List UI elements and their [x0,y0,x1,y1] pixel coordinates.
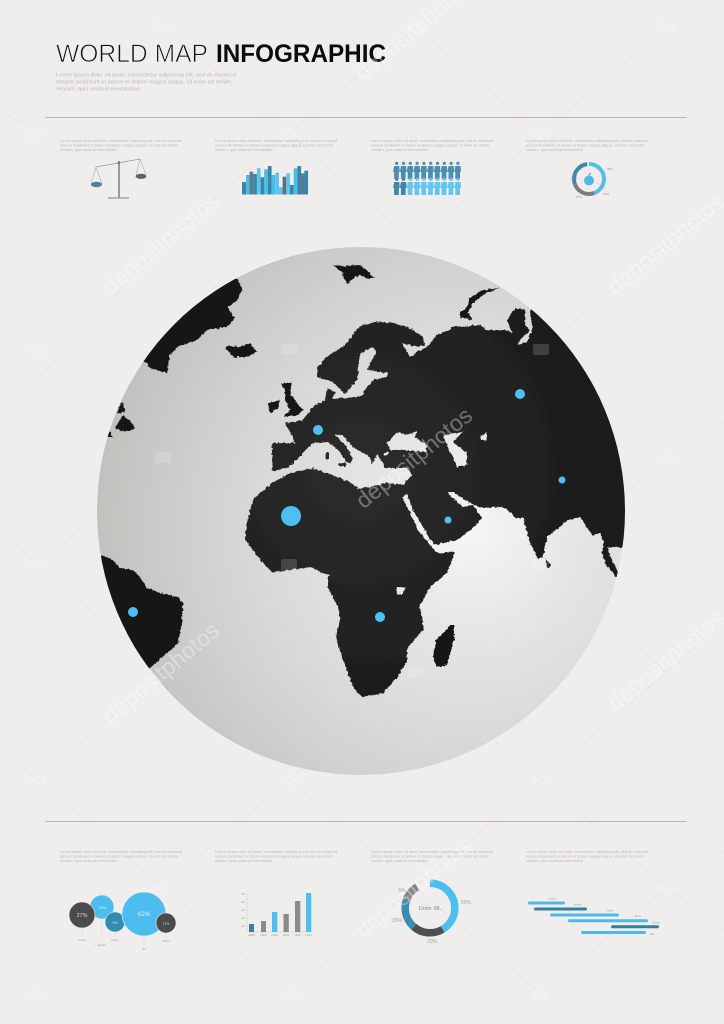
bubble chart: 17% [162,922,170,926]
icon: balance scale [91,159,146,199]
column bar chart: 2012 [294,933,301,937]
top column captions: Lorem ipsum dolor sit amet, consectetur adipiscing elit, sed do eiusmod [526,139,648,143]
bottom column captions: veniam, quis nostrud exercitation [60,859,117,863]
data dot: Siberia [515,389,525,399]
data dot: China [558,476,566,484]
gantt bars: Lorem [548,896,557,900]
map: Canadian islands [107,402,135,437]
bubble chart: 27% [76,913,88,919]
column bar chart: 60 [241,900,245,904]
data dot: West Africa [281,506,301,526]
map: Iceland [225,343,257,357]
bottom column captions: veniam, quis nostrud exercitation [526,859,583,863]
top column captions: tempor incididunt ut labore et dolore magna aliqua. Ut enim ad minim [215,144,333,148]
top column captions: Lorem ipsum dolor sit amet, consectetur adipiscing elit, sed do eiusmod [371,139,493,143]
bottom column captions: Lorem ipsum dolor sit amet, consectetur adipiscing elit, sed do eiusmod [215,850,337,854]
column bar chart: 2011 [283,933,290,937]
bottom column captions: tempor incididunt ut labore et dolore magna aliqua. Ut enim ad minim [215,854,333,858]
donut chart: 5% [398,888,406,894]
intro text: Lorem ipsum dolor sit amet, consectetur adipiscing elit, sed do eiusmod [56,72,236,78]
column bar chart [241,892,313,937]
bubble chart: 15% [98,905,106,910]
bubble chart: Dolor [111,938,119,942]
title: WORLD MAP [56,40,208,68]
bubble chart: 62% [138,912,151,918]
map: Madagascar [433,625,454,667]
column bar chart: 2009 [260,933,267,937]
bubble chart [69,892,176,951]
top column captions: tempor incididunt ut labore et dolore magna aliqua. Ut enim ad minim [526,144,644,148]
watermarks: depositphotos [97,617,224,729]
gantt bars: Duis [635,914,641,918]
gantt bars: Ipsum [574,902,583,906]
data dot: South America [128,607,138,617]
top column captions: Lorem ipsum dolor sit amet, consectetur adipiscing elit, sed do eiusmod [215,139,337,143]
watermarks: depositphotos [97,188,224,300]
map: Marmara [384,452,389,455]
map: South America [101,555,184,668]
column bar chart: 10 [241,924,245,928]
bubble chart: Ipsum [98,943,107,947]
bottom column captions: veniam, quis nostrud exercitation [215,859,272,863]
donut chart: 50% [461,900,472,906]
map: Aral Sea [481,432,487,440]
map: Eurasia and Africa [245,308,625,698]
icon: apple donut: 35% [607,167,613,171]
map: Britain [281,383,303,417]
top column captions: veniam, quis nostrud exercitation [215,148,272,152]
gantt bars [528,896,660,936]
top column captions: veniam, quis nostrud exercitation [60,148,117,152]
top column captions: tempor incididunt ut labore et dolore magna aliqua. Ut enim ad minim [371,144,489,148]
map: Sri Lanka [546,559,551,568]
top column captions: tempor incididunt ut labore et dolore magna aliqua. Ut enim ad minim [60,144,178,148]
column bar chart: 20 [241,916,245,920]
map: Lake Victoria [396,587,406,595]
bubble chart: 9% [112,921,118,925]
column bar chart: 80 [241,892,245,896]
donut chart: 15% [392,918,403,924]
intro text [56,72,236,92]
bottom column captions: Lorem ipsum dolor sit amet, consectetur adipiscing elit, sed do eiusmod [60,850,182,854]
bottom divider [45,821,687,822]
icon: people pictogram [393,162,461,195]
map: Black Sea [387,431,427,452]
title: INFOGRAPHIC [216,40,386,68]
watermarks [97,0,724,944]
globe [97,247,625,775]
bottom column captions: tempor incididunt ut labore et dolore magna aliqua. Ut enim ad minim [371,854,489,858]
icon: apple donut [571,164,613,199]
gantt bars: Dolor [606,908,614,912]
gantt bars: Sit [650,932,654,936]
map: Mediterranean sea [255,435,412,492]
icon: apple donut: 15% [571,176,577,180]
map: Caspian Sea [443,432,467,467]
title [56,40,386,68]
icon: apple donut: 25% [603,192,609,196]
data dot: Europe [313,425,323,435]
donut chart: Dolor 98. [419,906,442,912]
top column captions [60,139,648,152]
bottom column captions: tempor incididunt ut labore et dolore magna aliqua. Ut enim ad minim [60,854,178,858]
watermarks: depositphotos [350,402,477,514]
bubble chart: Amet [162,939,170,943]
intro text: tempor incididunt ut labore et dolore magna aliqua. Ut enim ad minim [56,80,231,86]
bottom column captions: Lorem ipsum dolor sit amet, consectetur adipiscing elit, sed do eiusmod [526,850,648,854]
icon: skyline bar chart [242,166,308,194]
bottom column captions [60,850,648,863]
map: Svalbard [333,265,375,283]
bottom column captions: Lorem ipsum dolor sit amet, consectetur adipiscing elit, sed do eiusmod [371,850,493,854]
watermarks: depositphotos [350,832,477,944]
column bar chart: 2010 [271,933,278,937]
data dot: Central Africa [375,612,385,622]
bottom column captions: tempor incididunt ut labore et dolore magna aliqua. Ut enim ad minim [526,854,644,858]
gantt bars: Amet [652,920,660,924]
column bar chart: 2013 [305,933,312,937]
donut chart: 20% [427,939,438,945]
map: Novaya Zemlya [460,288,500,320]
map: Sardinia and Sicily [326,453,347,466]
column bar chart: 2008 [248,933,255,937]
donut chart [392,883,472,945]
column bar chart: 40 [241,908,245,912]
top divider [45,117,687,118]
map: Greenland [120,260,242,373]
top column captions: veniam, quis nostrud exercitation [526,148,583,152]
bottom column captions: veniam, quis nostrud exercitation [371,859,428,863]
bubble chart: Sit [142,947,146,951]
map: Ireland [268,400,280,413]
bubble chart: Lorem [78,938,87,942]
intro text: veniam, quis nostrud exercitation [56,86,140,92]
icon: apple donut: 25% [576,195,582,199]
top column captions: Lorem ipsum dolor sit amet, consectetur adipiscing elit, sed do eiusmod [60,139,182,143]
data dot: Arabia [444,516,452,524]
top column captions: veniam, quis nostrud exercitation [371,148,428,152]
